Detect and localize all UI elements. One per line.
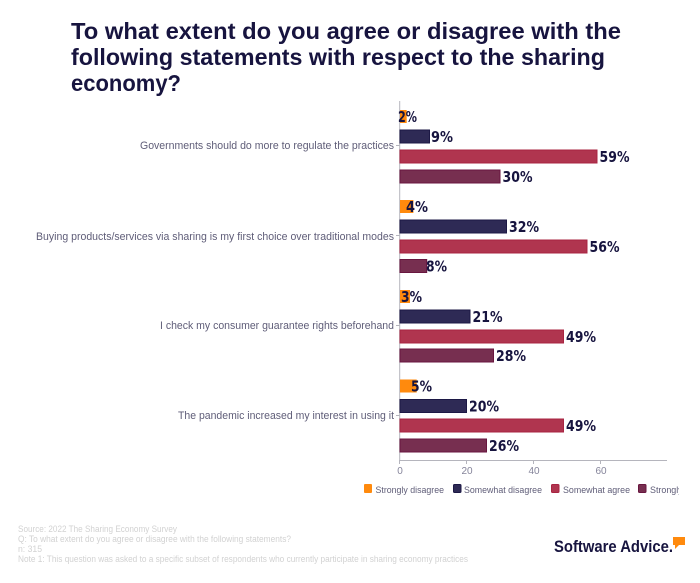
logo: Software Advice: Software Advice. <box>554 538 673 556</box>
group: consumer rights: 49% <box>566 328 596 346</box>
group: pandemic: 20% <box>469 398 499 416</box>
title: following statements with respect to the sharing <box>71 44 605 70</box>
footer notes: Q: To what extent do you agree or disagree with the following statements? <box>18 534 291 544</box>
group: consumer rights: 21% <box>472 308 502 326</box>
group: buying: 4% <box>406 198 428 216</box>
title <box>71 18 621 96</box>
group: buying: 8% <box>426 258 447 276</box>
x axis tick labels: 0 <box>397 466 403 477</box>
footer notes: Source: 2022 The Sharing Economy Survey <box>18 524 177 534</box>
group: governments: 30% <box>502 168 532 186</box>
category labels: I check my consumer guarantee rights beforehand <box>160 320 394 332</box>
x axis tick labels: 60 <box>595 466 607 477</box>
group: governments: 2% <box>398 108 417 126</box>
x axis tick labels: 20 <box>461 466 473 477</box>
chart axes <box>396 101 667 464</box>
x axis tick labels <box>397 466 607 477</box>
group: buying: 32% <box>509 218 539 236</box>
category labels <box>36 140 394 422</box>
group: consumer rights <box>400 288 596 365</box>
category labels: Buying products/services via sharing is my first choice over traditional modes <box>36 231 394 243</box>
footer notes <box>18 524 468 564</box>
group: buying: 56% <box>590 238 620 256</box>
group: pandemic: 49% <box>566 417 596 435</box>
group: pandemic <box>400 378 596 455</box>
title: economy? <box>71 70 181 96</box>
group: pandemic: 26% <box>489 437 519 455</box>
group: consumer rights: 3% <box>401 288 422 306</box>
footer notes: n: 315 <box>18 544 42 554</box>
legend: Somewhat agree <box>563 485 630 496</box>
legend: Somewhat disagree <box>464 485 542 496</box>
category labels: Governments should do more to regulate the practices <box>140 140 394 152</box>
group: pandemic: 5% <box>411 378 432 396</box>
title: To what extent do you agree or disagree with the <box>71 18 621 44</box>
group: buying <box>400 198 620 276</box>
x axis tick labels: 40 <box>528 466 540 477</box>
group: consumer rights: 28% <box>496 347 526 365</box>
category labels: The pandemic increased my interest in using it <box>178 410 394 422</box>
group: governments <box>398 108 630 186</box>
legend <box>364 484 679 495</box>
footer notes: Note 1: This question was asked to a specific subset of respondents who currently participate in sharing economy practices <box>18 554 468 564</box>
legend: Strongly disagree <box>376 485 444 496</box>
group: governments: 59% <box>600 148 630 166</box>
group: governments: 9% <box>431 128 453 146</box>
